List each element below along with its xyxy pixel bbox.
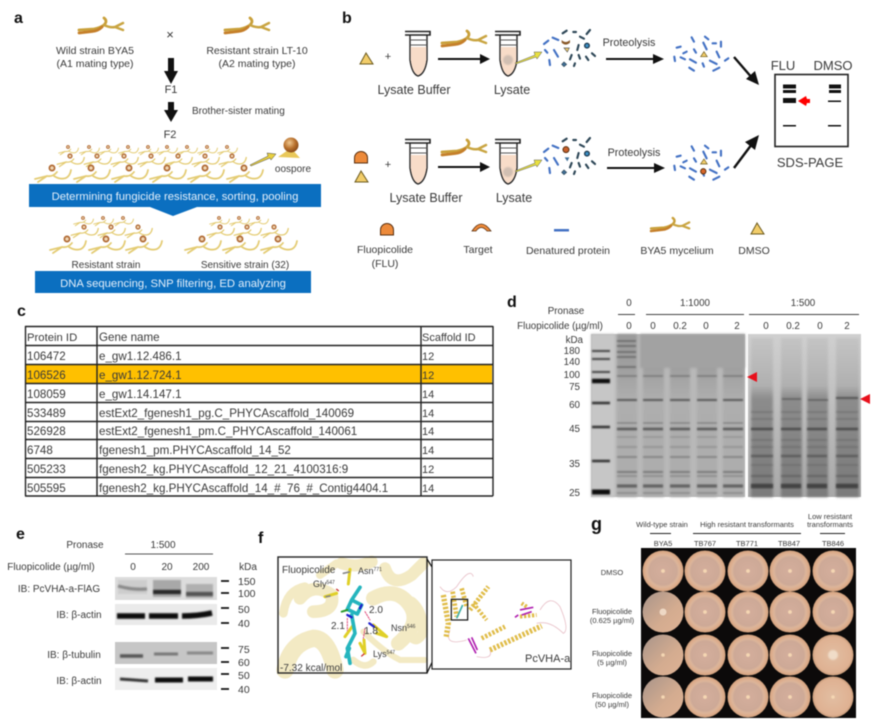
text: lysate buffer: Lysate Buffer [378, 83, 450, 97]
icon: lysate tube [495, 140, 520, 184]
text: F1: F1 [165, 84, 177, 96]
table text: fgenesh1_pm.PHYCAscaffold_14_52 [99, 444, 291, 457]
icon: resistant strain mycelium [225, 18, 269, 33]
oospore mycelium mat [35, 146, 263, 182]
table text: 12 [422, 464, 434, 476]
size labels: 150 [238, 576, 256, 588]
highlighted row [26, 365, 492, 383]
lane label FLU: FLU [771, 58, 795, 73]
text: lysate buffer: Lysate Buffer [390, 191, 462, 205]
blot labels: IB: β-actin [56, 610, 102, 621]
group headers: Low resistant [808, 512, 853, 521]
text: fluopicolide dose labels: 20 [161, 562, 173, 573]
red arrow: right gel [860, 394, 870, 404]
gel bands [783, 84, 841, 126]
blot: beta-actin 1 [115, 604, 217, 625]
text: 1:500: 1:500 [150, 540, 176, 551]
icon: mycelium [442, 140, 486, 155]
residue labels [313, 566, 416, 659]
arrow: add mycelium [438, 58, 482, 60]
blue bar: DNA sequencing [35, 271, 311, 293]
treatment labels: DMSO [601, 568, 623, 577]
text: resistant strain: Resistant strain [72, 260, 140, 271]
table text: 108059 [27, 388, 66, 401]
arrowhead [653, 54, 664, 64]
text: fluopicolide dose labels: 0 [130, 562, 136, 573]
table text: estExt2_fgenesh1_pg.C_PHYCAscaffold_140069 [99, 407, 354, 420]
plate photo background [641, 548, 856, 718]
column headers: 0 [817, 321, 823, 332]
table text: estExt2_fgenesh1_pm.C_PHYCAscaffold_140061 [99, 425, 357, 438]
protein mixture with drug [544, 138, 595, 175]
residue labels: Lys [373, 649, 387, 659]
group headers: transformants [807, 520, 853, 529]
panel label c: c [17, 303, 26, 320]
arrow: proteolysis [607, 167, 656, 169]
text: fluopicolide dose labels [7, 562, 257, 573]
text: proteolysis: Proteolysis [603, 37, 656, 49]
legend icon: DMSO [751, 223, 764, 234]
blot labels: IB: PcVHA-a-FlAG [18, 584, 100, 595]
residue labels: 547 [387, 650, 395, 656]
table text: 106472 [27, 350, 66, 363]
blot: PcVHA-a-FLAG [115, 577, 217, 600]
table text: e_gw1.12.724.1 [99, 369, 182, 382]
icon: lysate tube [495, 32, 520, 76]
SDS-PAGE diagram [771, 58, 852, 146]
residue labels: 547 [326, 580, 335, 586]
strain labels: TB767 [694, 539, 716, 548]
marker labels: 25 [569, 488, 581, 499]
marker labels: 140 [564, 357, 581, 368]
icon: DMSO triangle [360, 53, 373, 64]
protein mixture [544, 30, 595, 67]
text: wild strain: Wild strain BYA5 [56, 45, 134, 57]
zoom connector lines [427, 559, 452, 673]
treatment labels: Fluopicolide [592, 691, 632, 700]
text: sensitive strain: Sensitive strain (32) [201, 260, 289, 271]
text: resistant strain: (A2 mating type) [218, 58, 296, 70]
column headers: 0 [626, 321, 632, 332]
icon: fluopicolide half circle [354, 152, 368, 163]
lane label DMSO: DMSO [814, 58, 852, 73]
table text: e_gw1.12.486.1 [99, 350, 182, 363]
panel c: candidate gene table [17, 303, 493, 496]
residue labels: Asn [358, 566, 374, 576]
column headers: 0.2 [673, 321, 687, 332]
strain labels: TB771 [736, 539, 758, 548]
table text: 14 [422, 408, 434, 420]
table text: 12 [422, 351, 434, 363]
text: plus: + [385, 51, 391, 63]
table text: 526928 [27, 425, 66, 438]
column headers: 1:1000 [680, 298, 711, 309]
blot labels [18, 584, 102, 687]
legend text: mycelium: BYA5 mycelium [640, 245, 714, 257]
table text: 533489 [27, 407, 66, 420]
label: PcVHA-a: PcVHA-a [525, 653, 571, 665]
size labels: 50 [238, 670, 250, 682]
residue labels: Nsn [391, 623, 407, 633]
marker labels: 35 [569, 459, 581, 470]
marker labels: 180 [564, 346, 581, 357]
table text: 505233 [27, 463, 66, 476]
legend text: denatured protein: Denatured protein [526, 245, 610, 257]
size labels: 40 [238, 618, 250, 630]
group headers: Wild-type strain [636, 520, 688, 529]
table text: Scaffold ID [422, 332, 476, 344]
table text: 14 [422, 445, 434, 457]
callout arrow: lysate contents [515, 52, 542, 64]
blue bar: determining resistance [29, 184, 321, 207]
callout arrow: lysate contents [515, 160, 542, 172]
residue labels: 2.1 [331, 621, 345, 632]
blot: beta-actin 2 [115, 668, 217, 690]
text: fluopicolide dose labels: kDa [239, 562, 257, 573]
icon: mycelium [442, 31, 486, 46]
header rule [125, 553, 213, 555]
text: oospore: oospore [275, 164, 312, 175]
panel e: western blots [7, 526, 257, 696]
panel label e: e [16, 526, 25, 543]
gel frame [775, 74, 848, 146]
residue labels: 2.0 [369, 605, 383, 616]
panel b: protein stability workflow [342, 10, 852, 270]
text: lysate: Lysate [494, 83, 530, 97]
row label pronase: Pronase [548, 306, 585, 317]
right gel [748, 334, 861, 497]
denatured proteins [674, 37, 728, 71]
marker labels: 75 [569, 382, 581, 393]
close-up frame [278, 557, 427, 673]
arrow: F1 to F2 [164, 102, 178, 122]
blue bar: DNA sequencing: DNA sequencing, SNP filtering, ED analyzing [60, 278, 286, 290]
panel label b: b [342, 10, 352, 27]
text: F2: F2 [164, 129, 176, 141]
table text: 505595 [27, 482, 66, 495]
table text: 106526 [27, 369, 66, 382]
legend text: fluopicolide: Fluopicolide [357, 244, 413, 256]
icon: lysate buffer tube [405, 140, 430, 184]
legend text: DMSO: DMSO [738, 245, 770, 257]
panel label g: g [591, 514, 602, 534]
arrow: to SDS-PAGE [734, 57, 759, 85]
table grid [25, 326, 493, 496]
size labels: 40 [238, 684, 250, 696]
strain labels: TB846 [822, 539, 844, 548]
size labels: 100 [238, 588, 256, 600]
cross symbol: × [166, 27, 174, 42]
marker labels: 60 [569, 400, 581, 411]
residue labels: Gly [313, 579, 326, 589]
legend icon: fluopicolide [380, 224, 394, 235]
treatment labels: Fluopicolide [592, 607, 632, 616]
treatment labels: (50 µg/ml) [595, 700, 629, 709]
icon: wild strain mycelium [79, 18, 123, 33]
label: fluopicolide: Fluopicolide [282, 565, 336, 576]
legend icon: target [472, 224, 491, 231]
strain labels: BYA5 [654, 539, 672, 548]
residue labels: 771 [374, 567, 382, 573]
arrow: blue down [150, 207, 197, 216]
panel label d: d [507, 294, 517, 311]
size labels: 50 [238, 604, 250, 616]
panel label f: f [258, 530, 264, 547]
table text: 12 [422, 370, 434, 382]
arrow: to SDS-PAGE [734, 135, 759, 168]
table text: fgenesh2_kg.PHYCAscaffold_12_21_4100316:9 [99, 463, 348, 476]
panel f: molecular docking [258, 530, 571, 674]
icon: lysate buffer tube [405, 32, 430, 76]
column headers: 2 [734, 321, 740, 332]
text: brother-sister mating: Brother-sister mating [192, 106, 285, 117]
protein model [440, 573, 566, 657]
plates [642, 550, 854, 718]
group headers [636, 512, 853, 529]
callout arrow: oospore [250, 153, 276, 166]
column headers: 0 [703, 321, 709, 332]
blot labels: IB: β-actin [56, 676, 102, 687]
text: resistant strain: Resistant strain LT-10 [206, 45, 308, 57]
ligand and residue sticks [325, 569, 387, 663]
treatment labels: Fluopicolide [592, 649, 632, 658]
table text [27, 331, 476, 495]
size labels [238, 576, 256, 696]
arrow: add mycelium [438, 166, 482, 168]
column headers: 0 [650, 321, 656, 332]
sensitive strain mat [185, 217, 297, 253]
arrow: proteolysis [606, 58, 655, 60]
panel g: plate growth assay [590, 512, 856, 718]
left gel [591, 334, 745, 497]
arrowhead [480, 162, 490, 172]
label: binding energy: -7.32 kcal/mol [280, 663, 342, 674]
size labels: 75 [238, 644, 250, 656]
column headers: 0.2 [786, 321, 800, 332]
marker labels: 45 [569, 424, 581, 435]
blot labels: IB: β-tubulin [47, 650, 101, 661]
text: SDS-PAGE: SDS-PAGE [777, 155, 843, 170]
legend icon: mycelium [651, 218, 689, 231]
table text: e_gw1.14.147.1 [99, 388, 182, 401]
column headers: 0 [626, 298, 632, 309]
panel d: DARTS gel [507, 294, 870, 499]
red arrow [798, 96, 810, 106]
row label fluopicolide: Fluopicolide (µg/ml) [517, 321, 603, 332]
size ticks [221, 581, 229, 689]
marker labels: kDa [566, 335, 584, 346]
marker labels [564, 335, 584, 499]
table text: 6748 [27, 444, 53, 457]
column headers [626, 298, 850, 332]
table text: 14 [422, 426, 434, 438]
legend text: target: Target [463, 244, 493, 256]
red arrow: left gel [747, 372, 757, 382]
table text: 14 [422, 483, 434, 495]
legend icon: denatured protein [554, 229, 569, 232]
text: wild strain: (A1 mating type) [56, 58, 134, 70]
marker labels: 100 [564, 370, 581, 381]
arrowhead [654, 163, 665, 173]
arrow: parents to F1 [164, 58, 178, 84]
arrowhead [480, 54, 490, 64]
text: fluopicolide dose labels: Fluopicolide (µg/ml) [7, 562, 95, 573]
icon: oospore [278, 138, 300, 158]
table text: Gene name [99, 331, 160, 344]
group headers: High resistant transformants [700, 520, 794, 529]
size labels: 60 [238, 657, 250, 669]
residue labels: 546 [407, 624, 416, 630]
resistant strain mat [50, 217, 162, 253]
column headers: 0 [763, 321, 769, 332]
docking close-up [278, 557, 427, 674]
text: plus: + [385, 159, 391, 171]
group rules [650, 532, 845, 534]
treatment labels: (0.625 µg/ml) [590, 616, 635, 625]
table text: 14 [422, 389, 434, 401]
strain labels [654, 539, 844, 548]
text: lysate: Lysate [496, 191, 532, 205]
header rules [618, 314, 859, 316]
panel a: genetic cross workflow [14, 10, 321, 293]
blot: beta-tubulin [115, 642, 217, 664]
table text: fgenesh2_kg.PHYCAscaffold_14_#_76_#_Contig4404.1 [99, 482, 388, 495]
denatured proteins with protected target [674, 146, 728, 180]
table text: Protein ID [27, 332, 77, 344]
blue bar: determining resistance: Determining fungicide resistance, sorting, pooling [52, 191, 298, 203]
protein cartoon ribbons [283, 562, 425, 670]
text: fluopicolide dose labels: 200 [193, 562, 210, 573]
icon: DMSO triangle [355, 171, 368, 182]
whole protein structure [432, 560, 571, 669]
legend [357, 218, 770, 270]
residue labels: 1.8 [364, 626, 378, 637]
text: pronase: Pronase [66, 540, 104, 551]
treatment labels: (5 µg/ml) [597, 658, 627, 667]
legend text: fluopicolide: (FLU) [372, 258, 398, 270]
column headers: 2 [844, 321, 850, 332]
column headers: 1:500 [791, 298, 816, 309]
text: proteolysis: Proteolysis [608, 147, 661, 159]
panel label a: a [14, 10, 23, 27]
strain labels: TB847 [778, 539, 800, 548]
treatment labels [590, 568, 635, 709]
